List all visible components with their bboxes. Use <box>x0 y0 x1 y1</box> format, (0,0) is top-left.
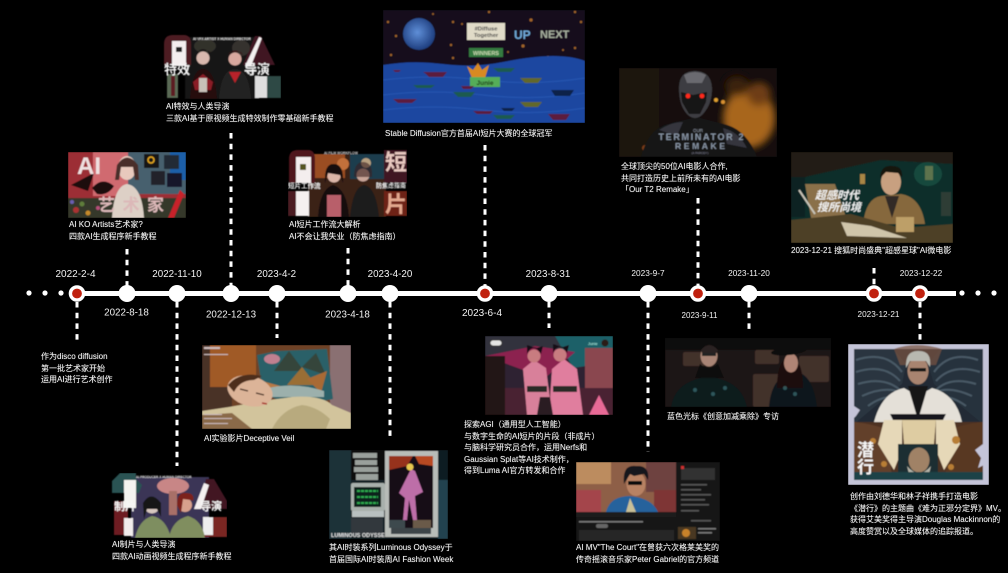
image: AI short film workflow thumbnail: 短 <box>385 150 407 175</box>
image: The Court music video page <box>576 462 720 541</box>
caption: Our T2 Remake <box>621 162 741 194</box>
red highlighted nodes <box>70 287 927 300</box>
image: AI short film workflow thumbnail <box>288 150 407 217</box>
date labels: 2023-12-21 <box>858 310 900 319</box>
date labels: 2022-11-10 <box>152 269 202 280</box>
caption: AI VFX <box>166 102 334 122</box>
image: Hidden Blade MV poster: 行 <box>857 458 874 477</box>
caption: The Court MV <box>576 542 719 564</box>
date labels: 2023-4-20 <box>368 269 413 280</box>
image: Stable Diffusion contest winner: UP <box>514 28 531 42</box>
image: Deceptive Veil still <box>202 345 351 429</box>
caption: AI producer: AI制片与人类导演 <box>112 540 176 549</box>
caption: disco diffusion: 作为disco diffusion <box>41 352 108 361</box>
dashed connectors <box>77 133 920 466</box>
image: Hidden Blade MV poster <box>848 344 989 485</box>
image: Our T2 Remake poster: TERMINATOR 2 <box>658 132 744 142</box>
image: Stable Diffusion contest winner: Junie <box>477 80 494 87</box>
date labels: 2023-9-7 <box>631 268 665 278</box>
caption: AGI research <box>464 420 600 475</box>
date labels: 2023-4-2 <box>257 269 296 280</box>
image: Stable Diffusion contest winner: Together <box>474 33 499 39</box>
image: Our T2 Remake poster <box>619 68 777 157</box>
image: AI VFX thumbnail <box>164 34 281 99</box>
image: Luminous Odyssey: LUMINOUS ODYSSE <box>331 533 385 539</box>
image: AI KO Artists thumbnail: 艺术家 <box>98 195 164 215</box>
caption: AGI research: 与数字生命的AI短片的片段（非成片） <box>464 432 600 440</box>
image: Blue Cursor interview still <box>665 338 831 407</box>
caption: Hidden Blade MV: 高度赞赏以及全球媒体的追踪报道。 <box>850 526 978 536</box>
image: Our T2 Remake poster: OUR <box>693 128 704 133</box>
caption: Our T2 Remake: 「Our T2 Remake」 <box>621 185 694 194</box>
image: AI short film workflow thumbnail: AI FILM WORKFLOW <box>324 151 359 155</box>
caption: Our T2 Remake: 共同打造历史上前所未有的AI电影 <box>621 174 741 182</box>
image: Stable Diffusion contest winner: WINNERS <box>473 51 499 57</box>
image: AI short film workflow thumbnail: 防焦虑指南 <box>376 182 406 190</box>
caption: AI KO Artists: 四款AI生成程序新手教程 <box>69 232 157 240</box>
image: AI producer thumbnail: 导演 <box>200 499 222 513</box>
caption: Hidden Blade MV <box>850 492 1006 536</box>
caption: AI KO Artists: AI KO Artists艺术家? <box>69 220 143 229</box>
date labels: 2023-9-11 <box>682 311 718 320</box>
caption: AI VFX: 三款AI基于原视频生成特效制作零基础新手教程 <box>166 114 334 122</box>
caption: AI KO Artists <box>68 220 157 240</box>
caption: AI short film workflow: AI短片工作流大解析 <box>289 220 361 229</box>
ellipsis dots <box>26 290 997 296</box>
image: AI KO Artists thumbnail <box>68 152 186 218</box>
image: Sohu AI micro film still: 搜所尚境 <box>817 201 863 214</box>
caption: Our T2 Remake: 全球顶尖的50位AI电影人合作, <box>621 162 728 171</box>
main axis line <box>77 291 956 296</box>
caption: Stable Diffusion contest: Stable Diffusion官方首届AI短片大赛的全球冠军 <box>385 129 552 138</box>
caption: Sohu micro film: 2023-12-21 搜狐时尚盛典"超感星球"AI微电影 <box>791 246 951 255</box>
image: AI producer thumbnail <box>112 473 227 538</box>
caption: Blue Cursor interview: 蓝色光标《创意加减乘除》专访 <box>667 412 779 421</box>
caption: The Court MV: AI MV"The Court"在曾获六次格莱美奖的 <box>576 543 719 552</box>
caption: Deceptive Veil: AI实验影片Deceptive Veil <box>204 434 294 443</box>
caption: AGI research: 探索AGI（通用型人工智能） <box>464 420 566 429</box>
image: AGI short film still: Junie <box>588 341 598 346</box>
image: AGI short film still <box>485 336 613 415</box>
caption: AI producer <box>112 540 232 560</box>
caption: AI short film workflow <box>288 220 401 240</box>
image: AI VFX thumbnail: 特效 <box>164 62 190 77</box>
caption: Luminous Odyssey: 其AI时装系列Luminous Odyssey于 <box>329 543 453 552</box>
image: Our T2 Remake poster: REMAKE <box>675 141 725 151</box>
image: AI short film workflow thumbnail: 片 <box>385 192 407 217</box>
image: Stable Diffusion contest winner: NEXT <box>540 29 570 41</box>
image: Stable Diffusion contest winner <box>383 10 585 123</box>
caption: Luminous Odyssey <box>329 542 454 564</box>
caption: Luminous Odyssey: 首届国际AI时装周AI Fashion Week <box>329 554 453 564</box>
caption: AI short film workflow: AI不会让我失业（防焦虑指南） <box>289 232 401 240</box>
date labels: 2022-2-4 <box>55 269 96 280</box>
caption: AGI research: Gaussian Splat等AI技术制作， <box>464 454 574 464</box>
caption: The Court MV: 传奇摇滚音乐家Peter Gabriel的官方频道 <box>576 554 719 564</box>
caption: AI producer: 四款AI动画视频生成程序新手教程 <box>112 552 232 560</box>
date labels: 2022-8-18 <box>104 308 149 318</box>
image: Our T2 Remake poster: (A PARODY) <box>691 151 709 155</box>
image: AI VFX thumbnail: AI VFX ARTIST X HUMAN DIRECTOR <box>193 37 251 41</box>
caption: AGI research: 与脑科学研究员合作，运用Nerfs和 <box>464 443 587 452</box>
caption: Hidden Blade MV: 创作由刘德华和林子祥携手打造电影 <box>850 492 978 501</box>
date labels: 2023-12-22 <box>900 268 943 278</box>
date labels <box>55 268 943 320</box>
date labels: 2023-8-31 <box>526 269 570 280</box>
caption: disco diffusion: 第一批艺术家开始 <box>41 364 105 372</box>
image: Stable Diffusion contest winner: #Diffuse <box>475 26 498 32</box>
image: Sohu AI micro film still: 超感时代 <box>815 189 861 202</box>
image: Sohu AI micro film still <box>791 152 953 243</box>
image: AI KO Artists thumbnail: AI <box>77 153 101 180</box>
image: AI VFX thumbnail: 导演 <box>244 62 270 77</box>
image: AI producer thumbnail: AI PRODUCER X HUMAN DIRECTOR <box>136 475 192 479</box>
caption: Hidden Blade MV: 获得艾美奖得主导演Douglas Mackinnon的 <box>850 515 1000 524</box>
caption: AI VFX: AI特效与人类导演 <box>166 102 230 111</box>
date labels: 2022-12-13 <box>206 310 257 320</box>
image: Luminous Odyssey <box>329 450 448 539</box>
caption: disco diffusion: 运用AI进行艺术创作 <box>41 375 113 384</box>
image: AI short film workflow thumbnail: 短片工作流 <box>288 181 321 190</box>
caption: Hidden Blade MV: 《潜行》的主题曲《难为正邪分定界》MV。 <box>850 504 1006 512</box>
date labels: 2023-4-18 <box>325 310 370 320</box>
date labels: 2023-6-4 <box>462 308 502 319</box>
image: AI producer thumbnail: 制片 <box>114 499 136 513</box>
caption: disco diffusion <box>41 352 113 384</box>
date labels: 2023-11-20 <box>728 268 770 278</box>
white nodes <box>118 285 758 302</box>
image: Hidden Blade MV poster: 潜 <box>857 441 874 460</box>
caption: AGI research: 得到Luma AI官方转发和合作 <box>464 466 565 475</box>
